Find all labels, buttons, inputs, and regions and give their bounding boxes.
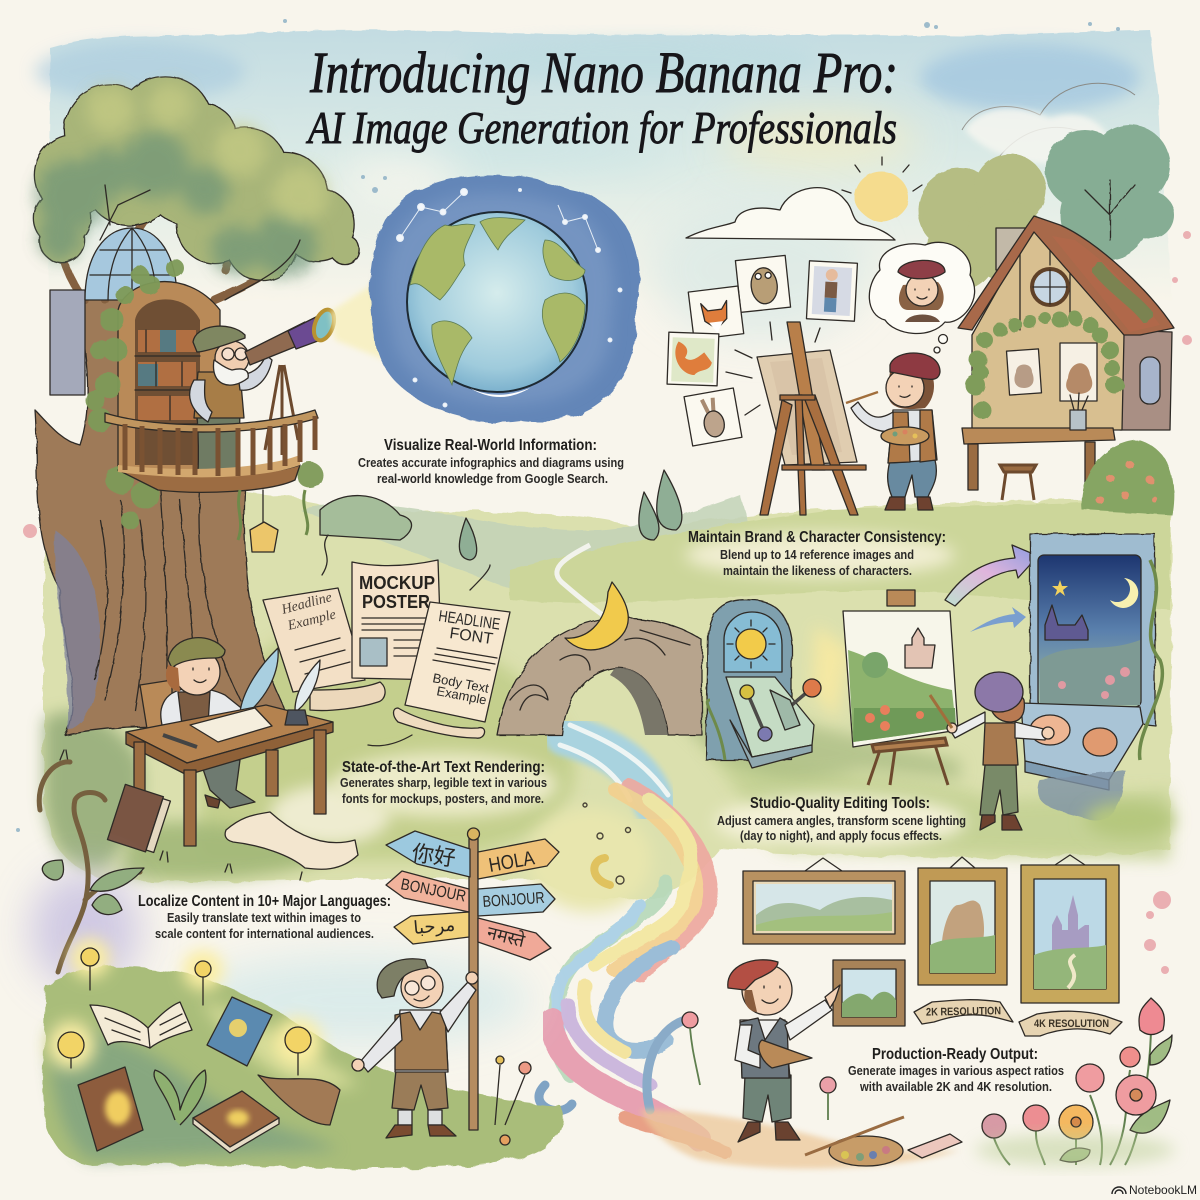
- cloud and sun: [686, 83, 1135, 240]
- title: AI Image Generation for Professionals: [306, 102, 897, 153]
- bulb glows: [47, 938, 322, 1069]
- text: studio-quality editing tools: Adjust camera angles, transform scene lighting: [717, 813, 966, 828]
- chair: [140, 680, 172, 735]
- text: studio-quality editing tools: Studio-Quality Editing Tools:: [750, 795, 930, 812]
- card: rabbit: [684, 388, 742, 446]
- walls: [972, 225, 1124, 430]
- head: [174, 649, 220, 695]
- card: boy: [806, 261, 857, 321]
- banana: [565, 582, 628, 650]
- ground meadow and hills: [44, 470, 1172, 912]
- brush: [846, 392, 878, 403]
- rainbow bands: [552, 785, 725, 1152]
- boy with red beret and palette: [728, 960, 840, 1142]
- trees behind cottage: [918, 125, 1174, 290]
- sign: hola: HOLA: [487, 847, 537, 877]
- text: state-of-the-art text rendering: fonts for mockups, posters, and more.: [342, 791, 544, 806]
- poster: mockup poster: [352, 560, 442, 680]
- easel with canvas: [757, 322, 866, 515]
- leaves: [1060, 1035, 1172, 1162]
- scroll: headline font: [394, 602, 510, 738]
- ribbon: 2K resolution: [914, 1000, 1013, 1024]
- scroll: headline font: FONT: [448, 625, 494, 648]
- scroll: headline font: Body Text: [431, 670, 490, 696]
- sky wash: [35, 30, 1172, 340]
- stems: [994, 1030, 1151, 1165]
- night sky halo: [370, 175, 640, 422]
- text: visualize real-world information: Creates accurate infographics and diagrams using: [358, 455, 624, 470]
- poster: mockup poster: POSTER: [362, 592, 430, 612]
- ivy on trunk: [85, 259, 323, 529]
- poster: mockup poster: MOCKUP: [359, 573, 435, 593]
- text: studio-quality editing tools: [717, 795, 966, 843]
- globe: [407, 212, 587, 397]
- text: brand and character consistency: Maintain Brand & Character Consistency:: [688, 529, 946, 546]
- open book: [90, 1002, 192, 1048]
- gallery of framed pictures: [743, 855, 1122, 1036]
- flower heads: [682, 998, 1164, 1139]
- text: localize content: scale content for international audiences.: [155, 926, 374, 941]
- half-buried books: [258, 1075, 340, 1125]
- telescope: [245, 307, 338, 455]
- sign: marhaba: [394, 912, 469, 944]
- text: visualize real-world information: Visualize Real-World Information:: [384, 437, 597, 454]
- frame: portrait rock: [918, 857, 1007, 985]
- text: localize content: [138, 893, 391, 941]
- cottage: [958, 216, 1174, 515]
- text: brand and character consistency: maintain the likeness of characters.: [723, 563, 912, 578]
- sun lever machine: [706, 600, 850, 768]
- observatory dome and stone tower: [50, 228, 177, 395]
- palette and paint box on ground: [805, 1117, 962, 1166]
- quill feather: [240, 648, 278, 720]
- river under bridge: [565, 735, 655, 805]
- title: Introducing Nano Banana Pro:: [309, 40, 898, 105]
- reference cards: [667, 255, 857, 446]
- chimney: [996, 228, 1026, 270]
- torso: [161, 688, 250, 730]
- text: localize content: Localize Content in 10+ Major Languages:: [138, 893, 391, 910]
- thought bubble with character: [869, 242, 975, 353]
- distant trees: [320, 470, 682, 560]
- blue book: [207, 997, 272, 1066]
- card: fox: [688, 286, 744, 340]
- ribbon: 2K resolution: 2K RESOLUTION: [926, 1005, 1001, 1019]
- side wing: [1120, 330, 1172, 430]
- text: production-ready output: Generate images in various aspect ratios: [848, 1063, 1064, 1078]
- sign: nihao: 你好: [410, 840, 457, 871]
- scroll: headline example: Headline: [279, 590, 334, 618]
- title: [306, 40, 898, 153]
- stacked books: [107, 784, 171, 854]
- text: state-of-the-art text rendering: Generates sharp, legible text in various: [340, 775, 547, 790]
- tree trunk: [35, 190, 310, 735]
- hanging lantern and vines: [238, 490, 308, 552]
- boy with glasses at signpost: [352, 959, 478, 1138]
- old man body: [190, 326, 272, 475]
- card: squirrel: [667, 332, 719, 386]
- trousers: [888, 460, 936, 497]
- sign: bonjour left: BONJOUR: [399, 876, 467, 906]
- tree canopy: [34, 77, 359, 280]
- sign: namaste: नमस्ते: [485, 922, 528, 951]
- ribbon: 4K resolution: [1019, 1011, 1122, 1036]
- balcony railing and deck: [105, 410, 318, 492]
- artist painting at easel: [846, 353, 940, 510]
- round window: [1032, 269, 1068, 305]
- text: production-ready output: Production-Ready Output:: [872, 1046, 1038, 1063]
- rose bush: [1082, 440, 1174, 515]
- torso and vest: [888, 410, 937, 463]
- scroll: headline font: HEADLINE: [437, 608, 501, 634]
- sprouts: [154, 1070, 206, 1125]
- globe panel: [370, 175, 640, 422]
- desk: [126, 705, 333, 846]
- old man at telescope: [190, 307, 338, 475]
- roof: [958, 216, 1174, 335]
- pole: [469, 838, 478, 1130]
- light beam from telescope to globe: [330, 247, 435, 380]
- rainbow river: [539, 725, 725, 1152]
- flower garden: [682, 998, 1175, 1166]
- text: state-of-the-art text rendering: State-of-the-Art Text Rendering:: [342, 759, 545, 776]
- text: localize content: Easily translate text within images to: [167, 910, 361, 925]
- text: production-ready output: with available 2K and 4K resolution.: [859, 1079, 1052, 1094]
- text posters and scrolls: [263, 535, 510, 746]
- ribbon: 4K resolution: 4K RESOLUTION: [1034, 1018, 1109, 1030]
- pinned drawings: [1007, 349, 1041, 395]
- flat brown book: [193, 1091, 279, 1147]
- text: visualize real-world information: [358, 437, 624, 486]
- head: [887, 370, 934, 409]
- sign: namaste: [478, 918, 551, 960]
- NotebookLM watermark: NotebookLM: [1129, 1183, 1197, 1197]
- frame: small hills: [833, 960, 905, 1026]
- sketched arrows: [322, 535, 490, 746]
- sign: hola: [478, 839, 559, 879]
- text: studio-quality editing tools: (day to night), and apply focus effects.: [740, 828, 942, 843]
- palette: [881, 427, 929, 445]
- ivy: [965, 311, 1124, 419]
- scroll: headline example: Example: [285, 607, 337, 634]
- sign: nihao: [386, 831, 470, 877]
- frame: wide landscape: [743, 858, 905, 944]
- tree with canopy and trunk: [34, 77, 359, 735]
- frame: portrait castle: [1021, 855, 1119, 1003]
- day landscape canvas on easel: [843, 590, 958, 785]
- night screen machine: [1021, 534, 1175, 838]
- text: visualize real-world information: real-world knowledge from Google Search.: [377, 471, 608, 486]
- legs under desk: [200, 760, 255, 808]
- curling vine tree: [39, 762, 140, 972]
- writing boy at desk: [60, 638, 358, 880]
- glowing bulbs: [47, 938, 322, 1075]
- day-to-night arrows: [945, 545, 1038, 632]
- brush cup: [1070, 410, 1086, 430]
- text: brand and character consistency: [688, 529, 946, 578]
- scroll: headline font: Example: [435, 683, 488, 708]
- fallen scroll: [225, 812, 358, 869]
- ink pot and second quill: [285, 710, 308, 725]
- dirt path: [640, 1110, 960, 1169]
- stool: [1000, 465, 1036, 500]
- leaves on vine: [42, 860, 144, 915]
- work table: [962, 428, 1115, 444]
- sign: marhaba: مرحبا: [413, 914, 456, 939]
- text: state-of-the-art text rendering: [340, 759, 547, 806]
- scroll: headline example: [263, 588, 385, 711]
- stone bridge: [497, 618, 702, 735]
- card: owl: [735, 255, 791, 312]
- books in the garden: [78, 997, 340, 1153]
- lower-left wash and grass: [30, 870, 563, 1169]
- text: brand and character consistency: Blend up to 14 reference images and: [720, 547, 914, 562]
- text: production-ready output: [848, 1046, 1064, 1094]
- standing brown book: [78, 1067, 143, 1151]
- bookshelf alcove: [118, 282, 220, 470]
- paint splatter dots: [16, 19, 1192, 974]
- sign: bonjour right: BONJOUR: [482, 890, 545, 911]
- winding path: [557, 545, 610, 620]
- signpost: [386, 828, 559, 1130]
- constellations: [396, 188, 622, 407]
- boy with purple beret: [930, 672, 1054, 830]
- sign: bonjour left: [386, 871, 469, 912]
- grass tufts: [60, 750, 302, 880]
- garden flowers by signpost: [495, 1056, 531, 1145]
- sign: bonjour right: [478, 884, 555, 916]
